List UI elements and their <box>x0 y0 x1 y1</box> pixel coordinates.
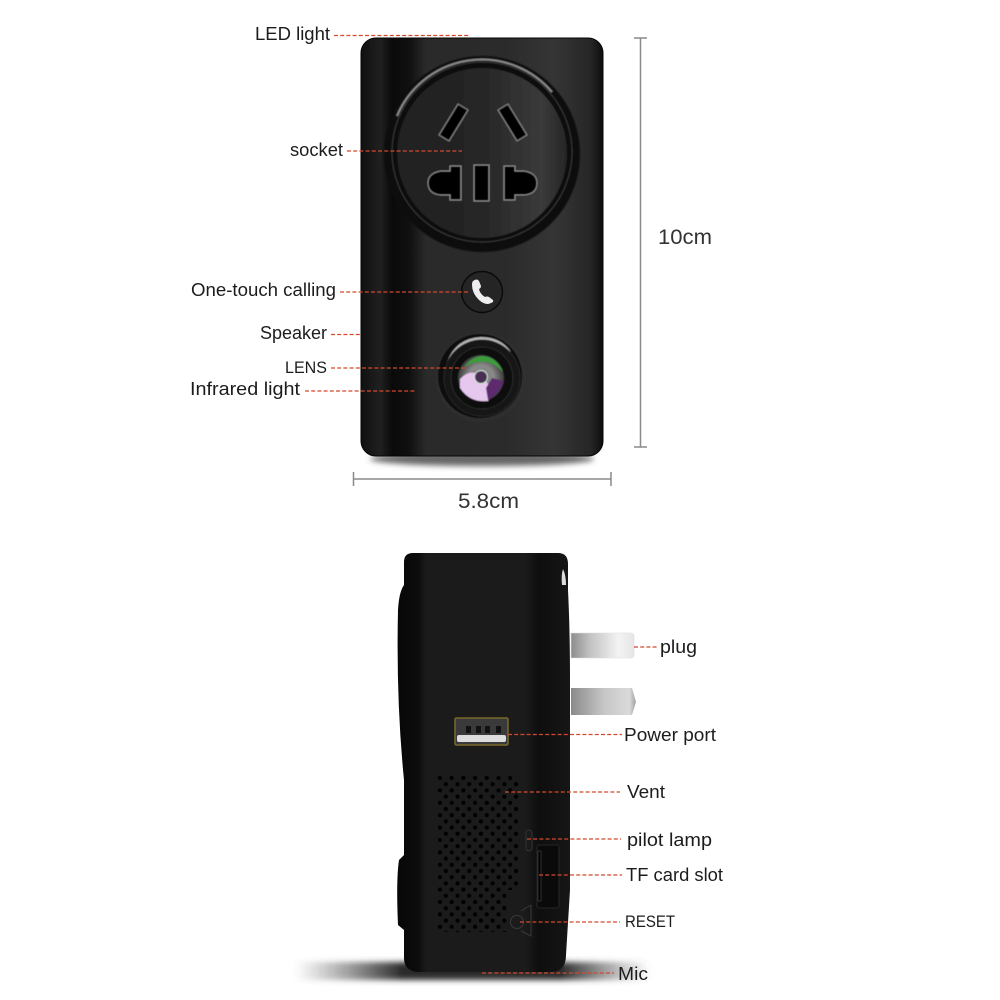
icon: phone handset <box>472 280 493 304</box>
TF card slot <box>537 845 559 908</box>
callout: infrared light: Infrared light <box>190 379 300 399</box>
dimension: height <box>634 38 712 447</box>
side highlight <box>562 569 566 585</box>
front shadow <box>370 452 594 466</box>
plug prongs <box>571 633 636 715</box>
power USB port <box>455 718 508 745</box>
pilot lamp <box>526 830 532 851</box>
callout: speaker: Speaker <box>260 323 327 343</box>
height value: 10cm <box>658 226 712 249</box>
front view of the device <box>361 38 603 466</box>
callout: TF card slot: TF card slot <box>626 865 723 885</box>
socket pin holes <box>428 104 537 201</box>
dimension: width <box>354 472 611 513</box>
callout: plug: plug <box>660 637 697 657</box>
side view of the device <box>295 553 650 980</box>
front body <box>361 38 603 456</box>
callout: pilot lamp: pilot lamp <box>627 830 712 850</box>
callout: speaker <box>260 323 361 343</box>
side body <box>397 553 570 972</box>
callout: power port: Power port <box>624 725 716 745</box>
side shadow <box>295 962 650 980</box>
width value: 5.8cm <box>458 490 519 513</box>
callout: plug <box>634 637 697 657</box>
one-touch call button <box>462 272 502 312</box>
callout: lens: LENS <box>285 359 327 377</box>
callout: LED light: LED light <box>255 24 330 44</box>
lens reflections <box>464 356 503 372</box>
callout: vent: Vent <box>627 782 665 802</box>
callout: mic: Mic <box>618 964 648 984</box>
vent holes <box>437 775 519 932</box>
camera lens <box>436 332 526 422</box>
reset button <box>510 905 531 936</box>
callout: reset: RESET <box>625 913 675 931</box>
callout: one-touch calling: One-touch calling <box>191 280 336 300</box>
callout: socket: socket <box>290 140 343 160</box>
socket <box>384 56 580 252</box>
